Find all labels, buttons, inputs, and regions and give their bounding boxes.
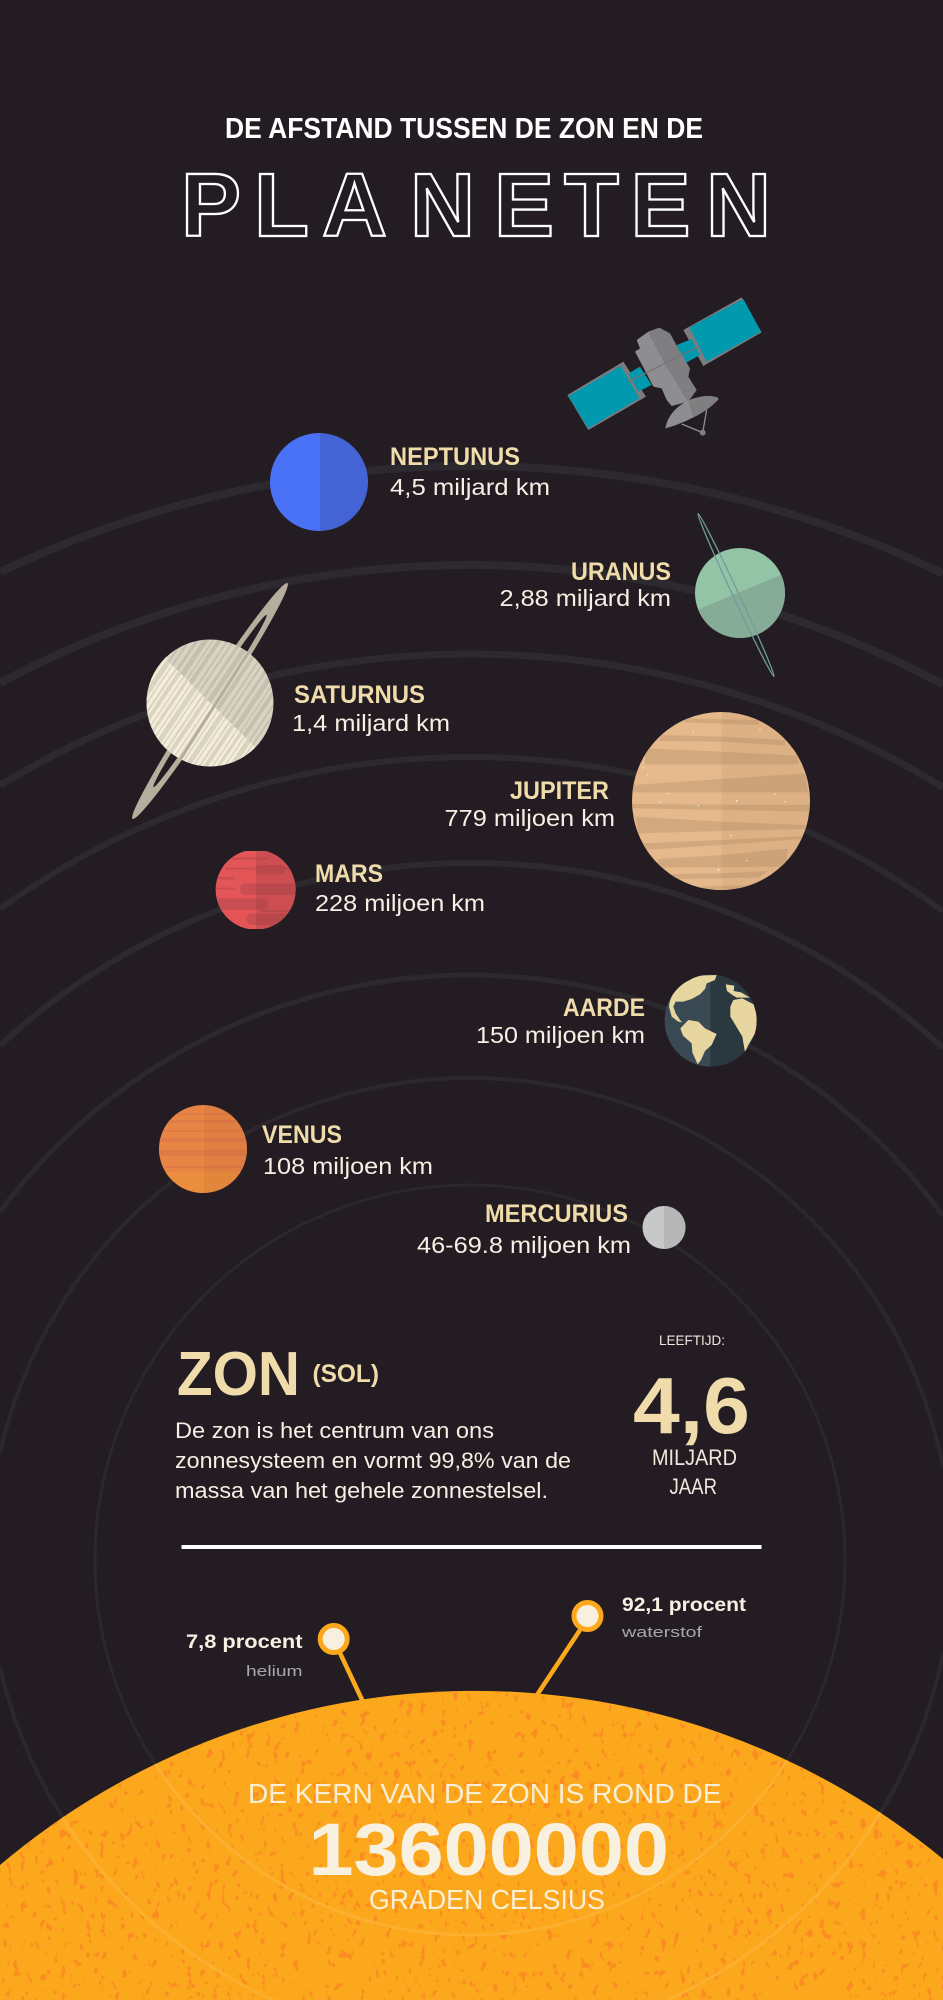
planet: Mars	[205, 851, 485, 929]
label: Aarde name: AARDE	[563, 994, 645, 1022]
icon: Mercurius globe	[642, 1206, 686, 1249]
label: Mercurius distance: 46-69.8 miljoen km	[417, 1232, 631, 1258]
icon: Saturnus ring	[124, 578, 296, 824]
icon: Mars globe	[216, 851, 296, 929]
text block: description: De zon is het centrum van ons	[175, 1418, 494, 1443]
label: Mars name: MARS	[315, 860, 383, 888]
icon: satellite	[567, 297, 762, 436]
planet: Jupiter	[446, 712, 810, 890]
icon: Neptunus globe	[270, 433, 370, 531]
text block: description: zonnesysteem en vormt 99,8% van de	[175, 1448, 571, 1473]
label: Uranus distance: 2,88 miljard km	[500, 585, 671, 611]
icon: Venus globe	[159, 1105, 248, 1193]
label: Neptunus distance: 4,5 miljard km	[390, 474, 550, 500]
planet: Venus	[159, 1105, 433, 1193]
planet: Aarde	[476, 972, 761, 1072]
planet: Mercurius	[417, 1200, 686, 1258]
text block: description: massa van het gehele zonnestelsel.	[175, 1478, 548, 1503]
label: Saturnus name: SATURNUS	[294, 681, 425, 709]
panel: zon description	[175, 1340, 571, 1503]
label: leeftijd: LEEFTIJD:	[659, 1332, 725, 1348]
callout: helium pin	[186, 1626, 363, 1701]
label: helium percentage: 7,8 procent	[186, 1632, 303, 1653]
title outline word: PLANETEN	[181, 156, 771, 256]
number: 4,6: 4,6	[633, 1361, 750, 1450]
faint orbits over sun	[61, 1760, 882, 2000]
label: Jupiter distance: 779 miljoen km	[444, 805, 615, 831]
panel: sun	[0, 1690, 943, 2000]
label: Mars distance: 228 miljoen km	[315, 890, 485, 916]
label: Mercurius name: MERCURIUS	[485, 1200, 628, 1228]
label: Jupiter name: JUPITER	[510, 777, 609, 805]
heading: SOL: (SOL)	[312, 1360, 379, 1388]
planet: Saturnus	[124, 578, 450, 824]
icon: Aarde globe	[664, 974, 757, 1067]
sun disc	[0, 1691, 943, 2000]
sun texture	[0, 1691, 943, 2000]
label: jaar: JAAR	[670, 1474, 717, 1499]
label: waterstof percentage: 92,1 procent	[622, 1595, 747, 1616]
label: waterstof: waterstof	[621, 1624, 703, 1641]
label: Venus name: VENUS	[262, 1121, 342, 1149]
title line: DE AFSTAND TUSSEN DE ZON EN DE	[225, 113, 703, 145]
label: helium: helium	[246, 1663, 302, 1680]
label: Neptunus name: NEPTUNUS	[390, 443, 520, 471]
label: Venus distance: 108 miljoen km	[263, 1153, 433, 1179]
icon: Saturnus globe	[140, 639, 274, 770]
icon: Uranus globe	[695, 548, 785, 638]
icon: Jupiter globe	[632, 712, 810, 890]
label: miljard: MILJARD	[652, 1445, 737, 1470]
heading: ZON: ZON	[177, 1340, 300, 1409]
label: Aarde distance: 150 miljoen km	[476, 1022, 645, 1048]
icon: Uranus ring	[695, 512, 777, 678]
sun temperature: 13600000	[308, 1808, 669, 1891]
sun caption top: DE KERN VAN DE ZON IS ROND DE	[248, 1778, 722, 1809]
planet: Uranus	[500, 512, 790, 678]
label: Uranus name: URANUS	[571, 558, 671, 586]
orbit rings	[0, 466, 943, 2000]
heading	[181, 113, 771, 256]
callout: waterstof pin	[537, 1595, 747, 1695]
sun caption bottom: GRADEN CELSIUS	[369, 1884, 605, 1915]
planet: Neptunus	[270, 433, 550, 531]
label: Saturnus distance: 1,4 miljard km	[292, 710, 450, 736]
panel: leeftijd stat	[633, 1332, 750, 1499]
text block: description	[175, 1418, 571, 1503]
